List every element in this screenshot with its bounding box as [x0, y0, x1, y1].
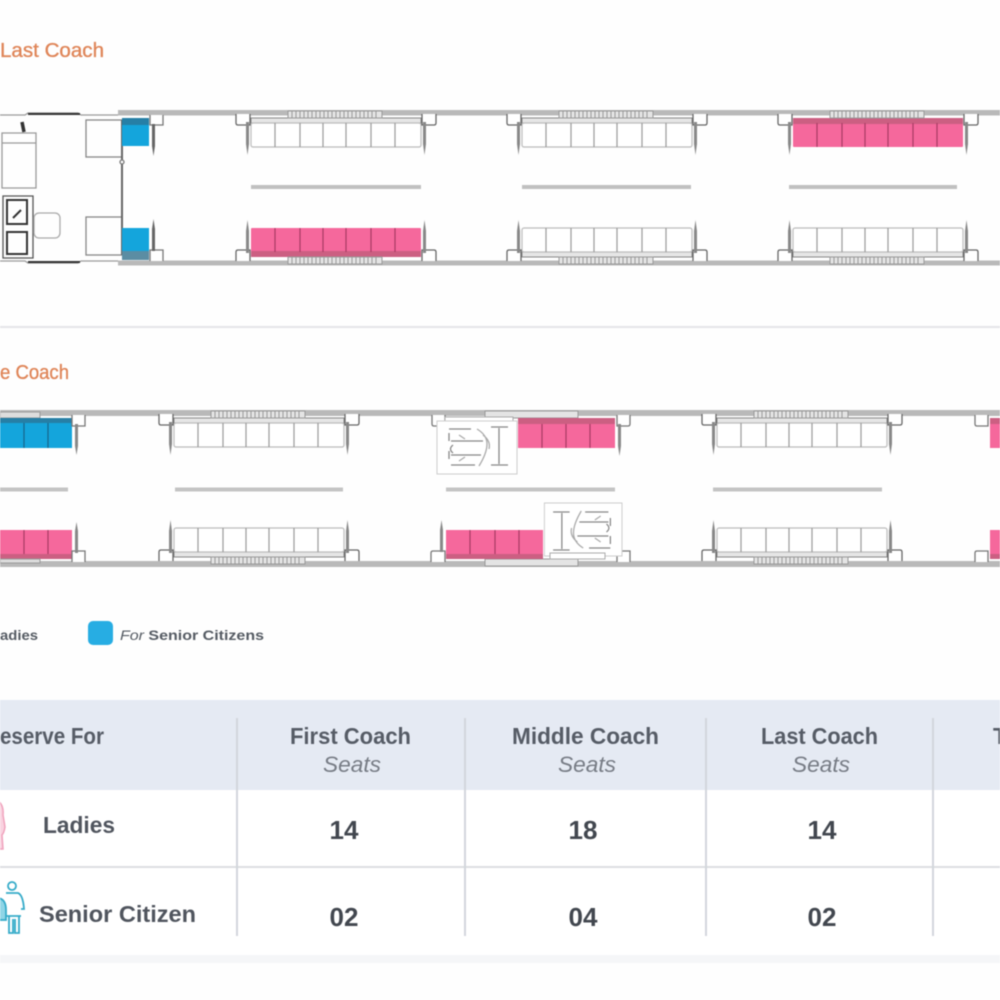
- bench group 4: [702, 411, 902, 455]
- header: middle coach seats: Seats: [558, 752, 616, 777]
- legend: senior citizens swatch: [88, 621, 113, 645]
- row label: ladies: Ladies: [43, 812, 115, 838]
- icon: senior citizen: [0, 882, 24, 933]
- partial right benches, ladies: [975, 415, 1000, 562]
- partial left bench, ladies: [0, 522, 85, 563]
- heading: middle coach: e Coach: [0, 362, 69, 384]
- value: first coach ladies: 14: [330, 815, 359, 845]
- table body: [0, 790, 1000, 955]
- header: last coach: Last Coach: [761, 723, 878, 749]
- bench group 1: [236, 111, 436, 155]
- coach plan: middle coach: [0, 410, 1000, 567]
- senior citizen seats, cab end: [122, 115, 163, 261]
- coach body rails: [0, 410, 1000, 567]
- bench group 2: [507, 111, 707, 155]
- coach plan: last coach: [0, 110, 1000, 266]
- aisle bars: [0, 488, 882, 492]
- divider: [0, 326, 1000, 328]
- header: reserve for: eserve For: [0, 723, 104, 749]
- header: first coach seats: Seats: [323, 752, 381, 777]
- driver cab: [0, 113, 124, 263]
- header: first coach: First Coach: [290, 723, 411, 749]
- bench group 5: [159, 520, 359, 564]
- table footer shade: [0, 955, 1000, 963]
- aisle bars: [251, 185, 957, 189]
- wheelchair bay and ladies seats, top: [432, 411, 630, 474]
- value: middle coach seniors: 04: [569, 902, 598, 932]
- table header band: [0, 700, 1000, 790]
- bench group 5: [507, 220, 707, 264]
- value: last coach seniors: 02: [808, 902, 836, 932]
- coach body rails: [118, 110, 1000, 266]
- header: last coach seats: Seats: [792, 752, 850, 777]
- row line and column lines: [0, 718, 1000, 936]
- value: middle coach ladies: 18: [569, 815, 597, 845]
- legend: ladies: adies: [0, 627, 38, 643]
- bench group 6: [778, 220, 978, 264]
- value: last coach ladies: 14: [808, 815, 837, 845]
- partial left bench, senior citizens: [0, 412, 85, 455]
- bench group 8: [702, 520, 902, 564]
- heading: last coach: Last Coach: [0, 40, 104, 62]
- bench group 1: [159, 411, 359, 455]
- header: middle coach: Middle Coach: [512, 723, 659, 749]
- row label: senior citizen: Senior Citizen: [39, 901, 196, 927]
- wheelchair bay and ladies seats, bottom: [431, 503, 630, 566]
- table: [0, 700, 1000, 963]
- legend: [0, 621, 264, 645]
- bench group 3, ladies: [778, 111, 978, 155]
- value: first coach seniors: 02: [330, 902, 358, 932]
- icon: lady: [0, 801, 5, 849]
- legend: senior citizens label: For Senior Citizens: [120, 627, 264, 643]
- bench group 4, ladies: [236, 220, 436, 264]
